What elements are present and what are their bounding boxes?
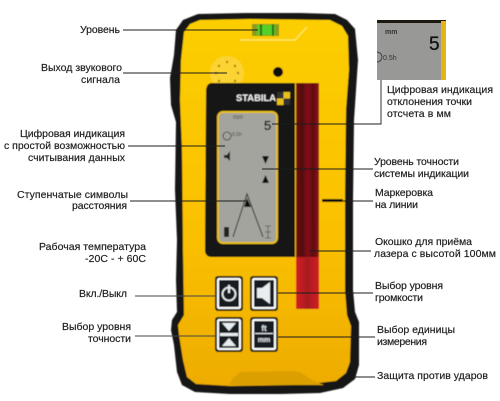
- label: accuracy level: [374, 156, 469, 180]
- label: units: Выбор единицы: [377, 324, 455, 336]
- label: accuracy level: системы индикации: [374, 168, 469, 180]
- speaker icon: [224, 151, 230, 161]
- label: laser window: Окошко для приёма: [375, 236, 472, 248]
- mm label: mm: [233, 115, 243, 121]
- label: sound outlet: [41, 62, 122, 86]
- battery icon: [224, 227, 229, 237]
- logo: STABILA: STABILA: [236, 93, 276, 104]
- label: volume: громкости: [375, 292, 423, 304]
- inset: magnified display: 5: [429, 34, 440, 55]
- arrow up: [262, 175, 269, 183]
- label: temperature: Рабочая температура: [39, 241, 146, 253]
- device: laser receiver: [170, 13, 359, 394]
- digit 5: 5: [264, 118, 271, 133]
- right labels: [374, 84, 496, 382]
- level highlight: [240, 27, 307, 40]
- yellow housing: [178, 19, 351, 386]
- label: digital display: [4, 128, 126, 164]
- label: units: измерения: [377, 336, 427, 348]
- logo: STABILA: [236, 92, 290, 105]
- label: deviation display: отклонения точки: [387, 96, 472, 108]
- label: power: Вкл./Выкл: [79, 288, 127, 300]
- label: deviation display: [387, 84, 493, 120]
- clock icon: [223, 132, 231, 140]
- label: line marking: [375, 187, 433, 211]
- label: stepped symbols: [17, 189, 128, 212]
- label: precision: точности: [88, 333, 131, 345]
- left labels: [4, 24, 146, 345]
- label: stepped symbols: расстояния: [72, 200, 127, 212]
- label: digital display: с простой возможностью: [4, 140, 125, 152]
- label: laser window: лазера с высотой 100мм: [374, 248, 496, 260]
- label: line marking: Маркеровка: [375, 187, 433, 199]
- button: units: ft: [261, 324, 267, 333]
- button: power: [215, 276, 243, 311]
- button: volume: [250, 276, 278, 311]
- button: units: [250, 317, 278, 352]
- label: level: Уровень: [80, 24, 121, 36]
- icon: sound outlet: [210, 56, 244, 90]
- inset: magnified display: [377, 20, 446, 80]
- bottom bump: [229, 371, 324, 385]
- label: accuracy level: Уровень точности: [374, 156, 459, 168]
- label: impact protection: Защита против ударов: [377, 370, 488, 382]
- label: stepped symbols: Ступенчатые символы: [17, 189, 128, 201]
- label: deviation display: Цифровая индикация: [387, 84, 493, 96]
- label: sound outlet: Выход звукового: [41, 62, 122, 74]
- button: precision: [215, 317, 243, 352]
- label: line marking: на линии: [375, 199, 418, 211]
- label: sound outlet: сигнала: [81, 74, 120, 86]
- label: digital display: считывания данных: [28, 152, 126, 164]
- inset: magnified display: mm: [385, 29, 397, 36]
- icon: hole: [273, 67, 283, 77]
- button: units: mm: [258, 337, 270, 344]
- label: laser window: [374, 236, 496, 260]
- label: units: [377, 324, 455, 348]
- LCD screen: [218, 112, 277, 243]
- black display panel: [205, 83, 295, 257]
- label: volume: [375, 280, 443, 304]
- arrow down: [262, 156, 269, 164]
- time label: 0.5h: [232, 132, 242, 138]
- antenna icon: [265, 226, 271, 238]
- rubber bumper: [170, 13, 359, 394]
- label: precision: Выбор уровня: [62, 321, 131, 333]
- inset: magnified display: 0.5h: [383, 55, 397, 62]
- label: deviation display: отсчета в мм: [387, 108, 451, 120]
- leader lines: [123, 30, 381, 377]
- label: temperature: -20C - + 60C: [85, 253, 146, 265]
- distance triangle: [233, 194, 263, 237]
- label: precision: [62, 321, 131, 345]
- level marker: [322, 199, 343, 202]
- label: digital display: Цифровая индикация: [20, 128, 125, 140]
- label: temperature: [39, 241, 146, 265]
- label: volume: Выбор уровня: [375, 280, 443, 292]
- icon: level vial: [252, 24, 279, 36]
- laser window: [296, 83, 319, 309]
